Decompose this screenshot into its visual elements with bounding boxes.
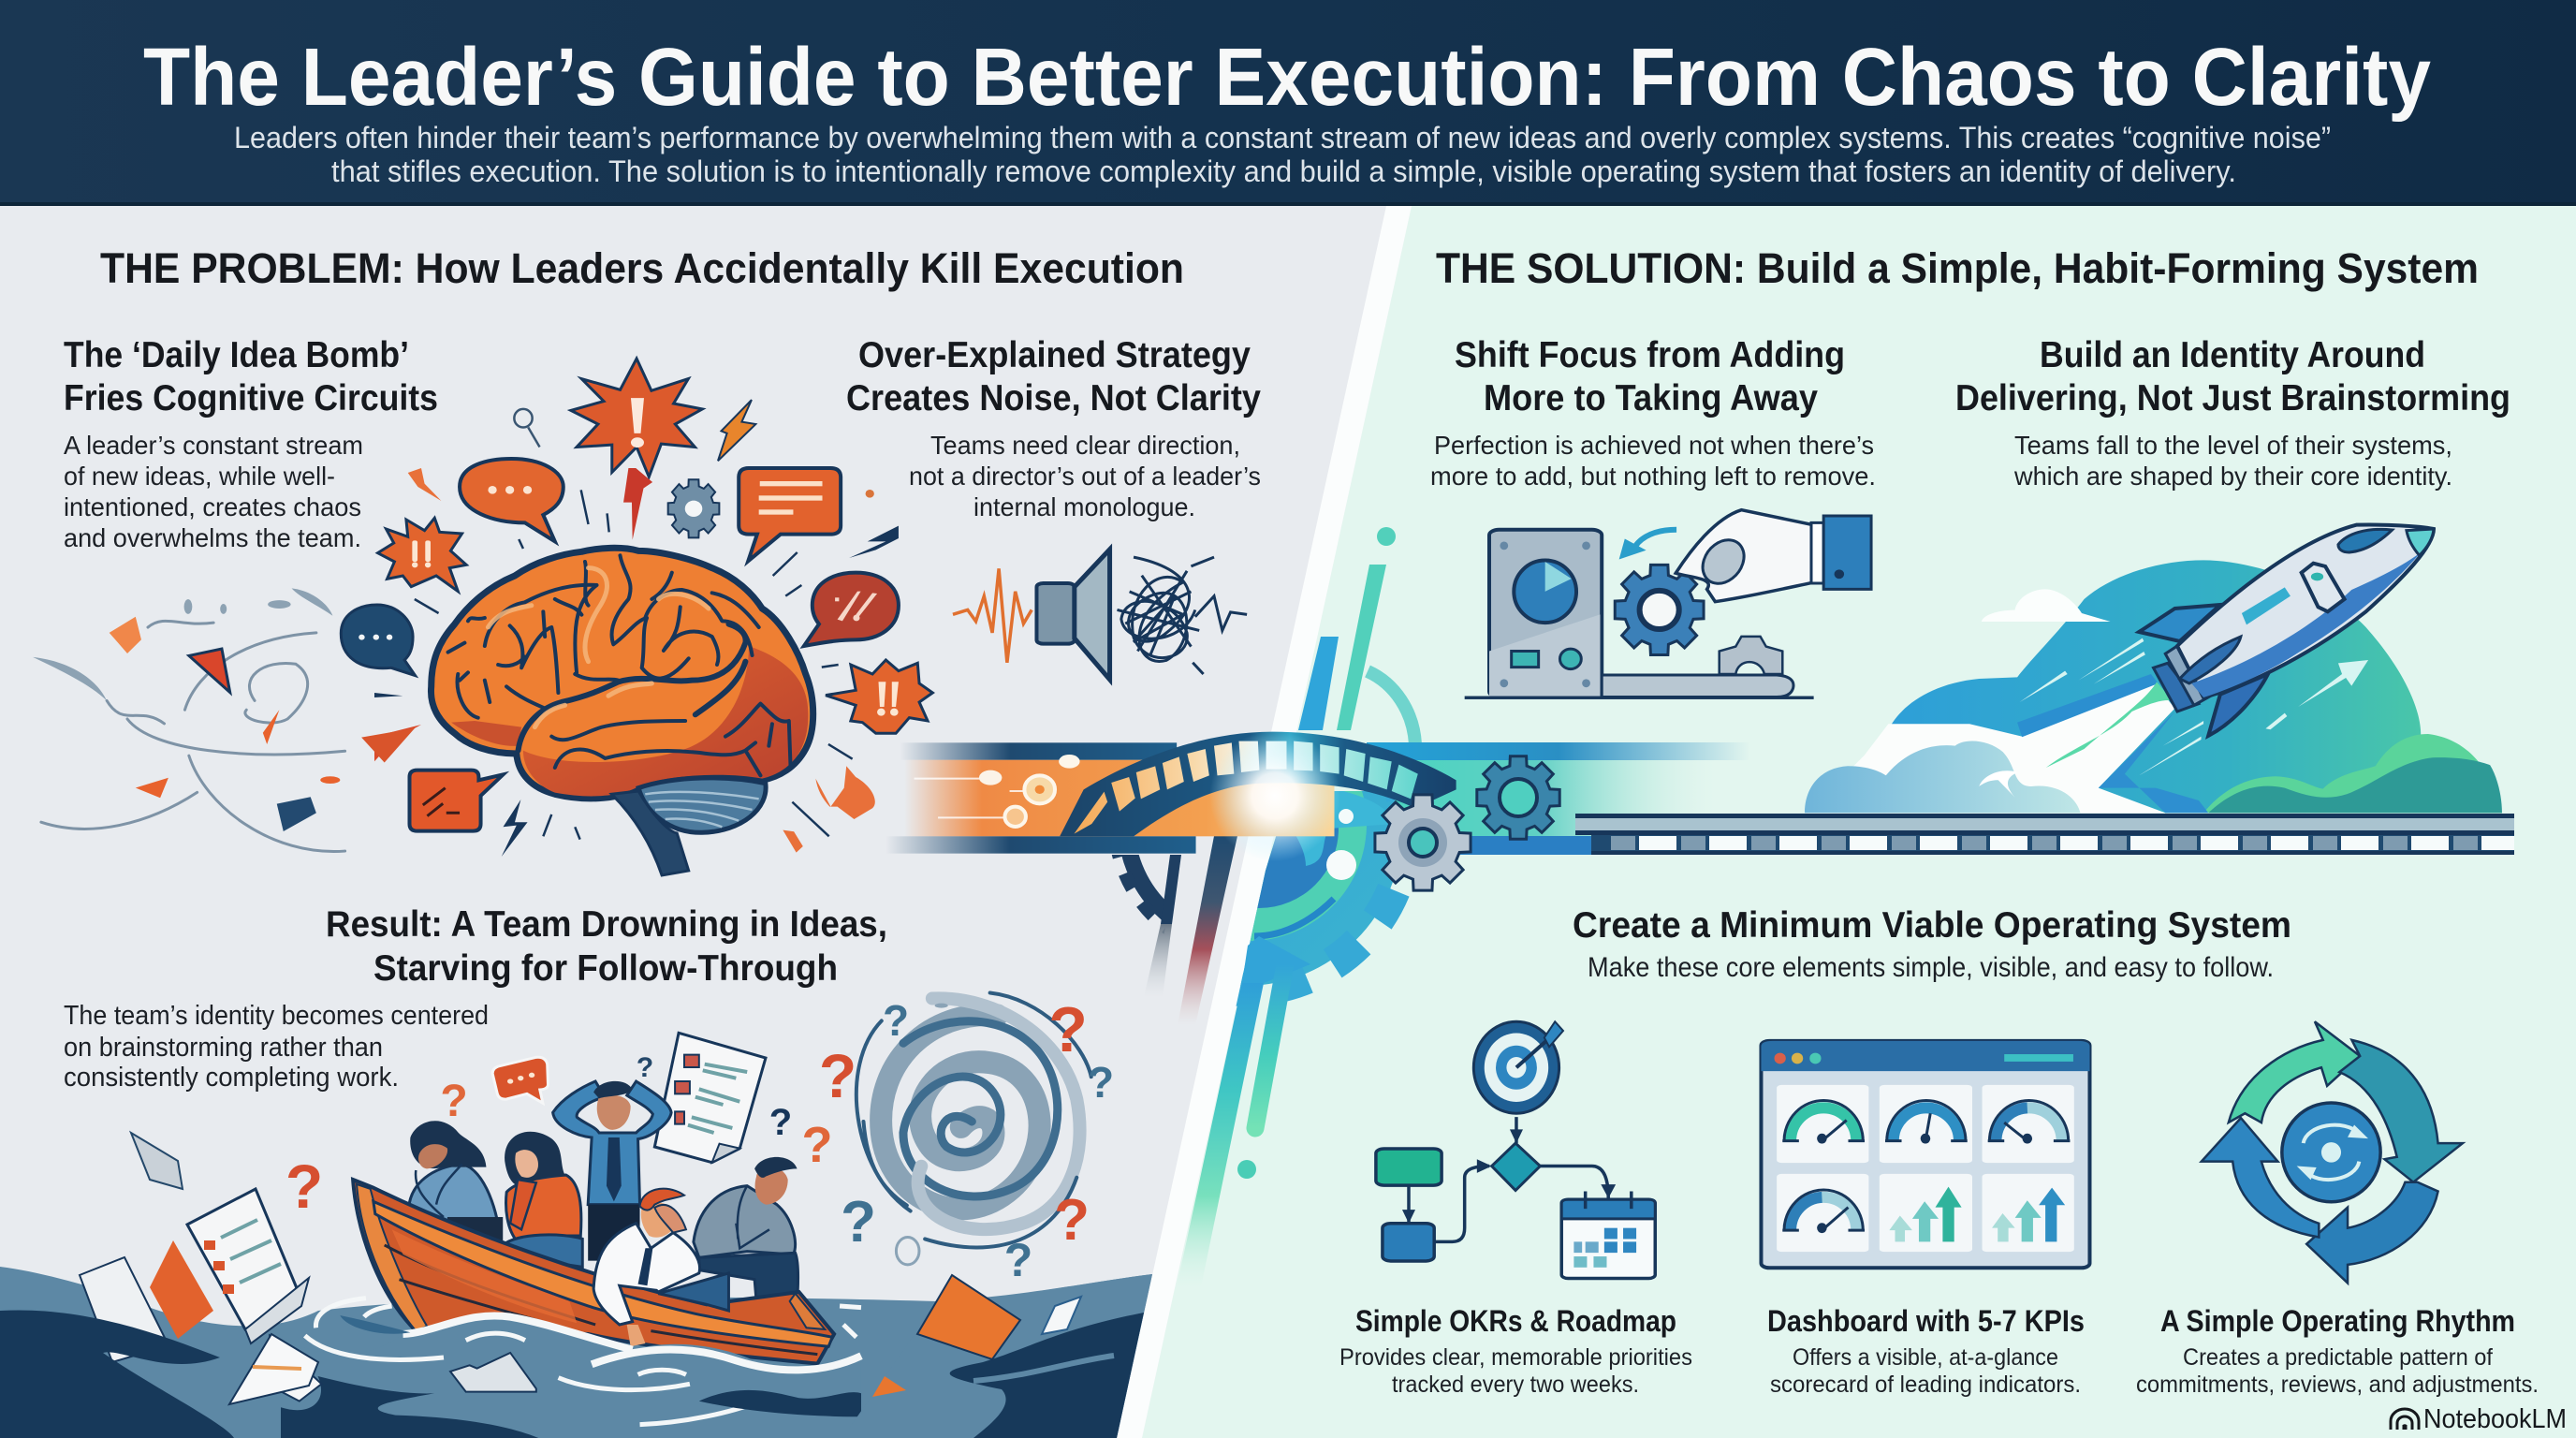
illustration: team adrift in boat — [0, 1033, 1152, 1438]
text block: dashboard: Offers a visible, at-a-glance — [1793, 1344, 2058, 1371]
icon: red lightning above brain — [623, 468, 652, 540]
lower teal bars — [1144, 836, 1310, 1287]
question marks: ? — [1004, 1234, 1032, 1286]
brain lobes — [431, 548, 813, 799]
hand and wrench — [1676, 510, 1814, 602]
subtitle: Leaders often hinder their team’s performance by overwhelming them with a constant stream of new ideas and overly complex systems. This creates “cognitive noise” — [234, 121, 2331, 154]
illustration: rocket launch — [1805, 525, 2502, 813]
water front waves — [281, 1336, 406, 1383]
text block: daily idea bomb: of new ideas, while well- — [64, 462, 335, 491]
text block: simple OKRs: Simple OKRs & Roadmap — [1355, 1304, 1676, 1338]
icon: orange square bubble — [409, 770, 503, 831]
icon: lightning orange — [718, 400, 755, 461]
subtitle — [234, 121, 2331, 188]
cockpit window — [2338, 529, 2393, 552]
icon: red speech bubble — [804, 573, 899, 646]
text block: over-explained strategy — [846, 335, 1261, 521]
text block: minimum viable operating system: Create a Minimum Viable Operating System — [1573, 905, 2291, 946]
text block: daily idea bomb: The ‘Daily Idea Bomb’ — [64, 335, 409, 375]
brain dark rear — [523, 646, 808, 796]
text block: shift focus: More to Taking Away — [1484, 378, 1818, 418]
icon: exclamation star left — [378, 518, 466, 592]
speed streaks — [2020, 638, 2368, 775]
question marks — [285, 994, 1114, 1286]
headings: section titles: THE PROBLEM: How Leaders Accidentally Kill Execution — [100, 244, 1184, 292]
question marks: ? — [819, 1041, 856, 1110]
person: front man in white shirt — [593, 1224, 700, 1325]
question marks: ? — [883, 996, 909, 1045]
text block: daily idea bomb: and overwhelms the team. — [64, 523, 361, 552]
dark water swells — [281, 1315, 861, 1438]
left floating papers — [80, 1133, 309, 1362]
gauges — [1782, 1101, 2070, 1230]
text block: over-explained strategy: Over-Explained Strategy — [858, 335, 1251, 375]
water back layer — [0, 1267, 1152, 1438]
illustration: swirling chaos debris — [33, 588, 415, 852]
tangled noise scribble — [1117, 557, 1247, 674]
target — [1473, 1021, 1559, 1113]
person: woman left — [408, 1164, 501, 1242]
machine cabinet — [1489, 530, 1602, 697]
rocket body — [2177, 525, 2434, 697]
icon: rectangular speech bubble — [739, 468, 841, 561]
text block: daily idea bomb: A leader’s constant stream — [64, 431, 363, 460]
flow boxes — [1376, 1149, 1442, 1185]
background hill — [1891, 560, 2502, 813]
question marks: ? — [1088, 1058, 1114, 1107]
icon: gray gear — [668, 479, 719, 537]
floating memo — [270, 1336, 321, 1401]
scattered marks — [415, 490, 853, 840]
icon: KPI dashboard — [1761, 1041, 2089, 1268]
blue gear — [1615, 565, 1704, 655]
title: The Leader’s Guide to Better Execution: From Chaos to Clarity — [143, 32, 2431, 123]
icon: exclamation star right — [826, 660, 932, 733]
orange splash — [815, 766, 875, 819]
diagonal divider — [1117, 206, 1412, 1438]
speaker — [1036, 583, 1075, 644]
rocket lower fin — [2208, 674, 2268, 736]
illustration: brain with burst of speech bubbles — [341, 459, 932, 875]
text block: daily idea bomb: intentioned, creates chaos — [64, 492, 361, 521]
icon: navy speech bubble — [341, 605, 416, 676]
text block: operating rhythm — [2136, 1304, 2539, 1398]
text block: result: consistently completing work. — [64, 1063, 399, 1093]
removal arrow — [1633, 530, 1676, 550]
rising arrows — [1889, 1187, 2065, 1241]
cerebellum — [638, 778, 766, 832]
floating note and marker — [1042, 1297, 1081, 1334]
floating orange folder — [917, 1275, 1020, 1359]
headings: section titles: THE SOLUTION: Build a Simple, Habit-Forming System — [1436, 244, 2479, 292]
text block: over-explained strategy: not a director’s out of a leader’s — [909, 462, 1261, 491]
person: standing man — [553, 1081, 671, 1205]
debris shards — [110, 617, 415, 831]
icon: explosion and lightning burst — [514, 359, 755, 477]
question marks: ? — [637, 1052, 653, 1083]
illustration: tornado of questions — [856, 993, 1091, 1265]
large gear behind bridge — [1112, 791, 1410, 1006]
panel: problem background — [0, 206, 1386, 1438]
text block: over-explained strategy: Teams need clear direction, — [930, 431, 1240, 460]
rocket hatch — [2302, 564, 2345, 611]
person: gray sweater man — [694, 1186, 796, 1257]
headings: section titles — [100, 244, 2479, 292]
text block: minimum viable operating system: Make these core elements simple, visible, and easy to follow. — [1588, 952, 2274, 983]
blue gear icon — [1477, 756, 1559, 839]
question marks: ? — [440, 1077, 468, 1126]
icon: pin — [514, 409, 540, 448]
side booster — [2180, 637, 2241, 683]
person: woman orange — [506, 1175, 581, 1242]
text block: daily idea bomb — [64, 335, 438, 552]
floating folder — [450, 1353, 536, 1392]
film-strip track — [1575, 814, 2514, 855]
conveyor and small gear — [1602, 675, 1793, 697]
question marks: ? — [769, 1102, 792, 1143]
icon: okrs and roadmap flow — [1376, 1021, 1655, 1279]
text block: operating rhythm: A Simple Operating Rhythm — [2160, 1304, 2515, 1338]
text block: operating rhythm: Creates a predictable pattern of — [2183, 1344, 2493, 1371]
text block: simple OKRs — [1339, 1304, 1692, 1398]
text block: operating rhythm: commitments, reviews, and adjustments. — [2136, 1372, 2539, 1398]
text block: daily idea bomb: Fries Cognitive Circuits — [64, 378, 438, 418]
brain stem — [612, 791, 689, 875]
text block: result: Starving for Follow-Through — [373, 948, 838, 989]
rocket engines — [2154, 663, 2199, 712]
calendar — [1561, 1199, 1655, 1279]
header banner — [0, 0, 2576, 206]
question marks: ? — [1048, 994, 1088, 1065]
text block: shift focus: Perfection is achieved not when there’s — [1434, 431, 1874, 460]
icon: oval speech bubble — [460, 459, 564, 541]
text block: build an identity: Delivering, Not Just Brainstorming — [1955, 378, 2510, 418]
text block: simple OKRs: tracked every two weeks. — [1392, 1372, 1639, 1398]
question marks: ? — [841, 1190, 876, 1255]
flow connectors — [1409, 1117, 1608, 1241]
text block: over-explained strategy: internal monologue. — [973, 492, 1195, 521]
chaos band — [886, 742, 1335, 854]
bridge arch — [1060, 732, 1456, 836]
cuff — [1811, 522, 1823, 583]
text block: dashboard: scorecard of leading indicators. — [1770, 1372, 2081, 1398]
text block: minimum viable operating system — [1573, 905, 2291, 983]
text block: result — [64, 904, 887, 1093]
green foothills — [2203, 734, 2502, 813]
text block: shift focus: more to add, but nothing left to remove. — [1430, 462, 1876, 491]
clarity band — [1367, 742, 1750, 760]
brain highlights — [488, 568, 709, 727]
icon: orange lightning left — [408, 468, 441, 501]
question marks: ? — [801, 1117, 833, 1173]
rocket upper fin — [2139, 605, 2220, 641]
text block: build an identity — [1955, 335, 2510, 491]
text block: result: The team’s identity becomes centered — [64, 1001, 489, 1031]
text block: dashboard: Dashboard with 5-7 KPIs — [1767, 1304, 2085, 1338]
NotebookLM badge: NotebookLM — [2423, 1404, 2567, 1434]
boat hull — [353, 1180, 834, 1364]
question marks: ? — [285, 1152, 323, 1221]
subtitle: that stifles execution. The solution is to intentionally remove complexity and build a simple, visible operating system that fosters an identity of delivery. — [331, 154, 2236, 188]
brain folds — [448, 555, 791, 775]
icon: lightning navy — [502, 800, 528, 857]
text block: result: Result: A Team Drowning in Ideas, — [326, 904, 887, 945]
text block: shift focus — [1430, 335, 1876, 491]
exhaust — [1808, 679, 2174, 813]
chaos to clarity bridge — [886, 730, 1750, 861]
connecting teal bars above the bridge — [1298, 527, 1415, 744]
text block: over-explained strategy: Creates Noise, Not Clarity — [846, 378, 1261, 418]
icon: operating rhythm cycle — [2202, 1021, 2463, 1283]
gray gear icon — [1375, 795, 1471, 890]
small cloud — [1982, 589, 2111, 622]
text block: build an identity: which are shaped by their core identity. — [2013, 462, 2452, 491]
text block: dashboard — [1767, 1304, 2085, 1398]
text block: build an identity: Build an Identity Around — [2040, 335, 2425, 375]
panel: solution background — [1142, 206, 2576, 1438]
text block: build an identity: Teams fall to the level of their systems, — [2014, 431, 2452, 460]
checklist document — [654, 1033, 766, 1163]
illustration: speaker with noise — [953, 550, 1247, 680]
worried speech bubble — [492, 1057, 548, 1103]
question marks: ? — [1054, 1188, 1090, 1253]
blue cloud — [1805, 741, 2080, 813]
water right side — [842, 1274, 1152, 1438]
text block: result: on brainstorming rather than — [64, 1033, 383, 1063]
orange clean wave — [953, 568, 1032, 663]
text block: shift focus: Shift Focus from Adding — [1455, 335, 1845, 375]
clarity glow — [1209, 730, 1340, 861]
illustration: machine with gear removal — [1465, 510, 1871, 699]
text block: simple OKRs: Provides clear, memorable priorities — [1339, 1344, 1692, 1371]
icon: dark lightning — [849, 526, 899, 558]
